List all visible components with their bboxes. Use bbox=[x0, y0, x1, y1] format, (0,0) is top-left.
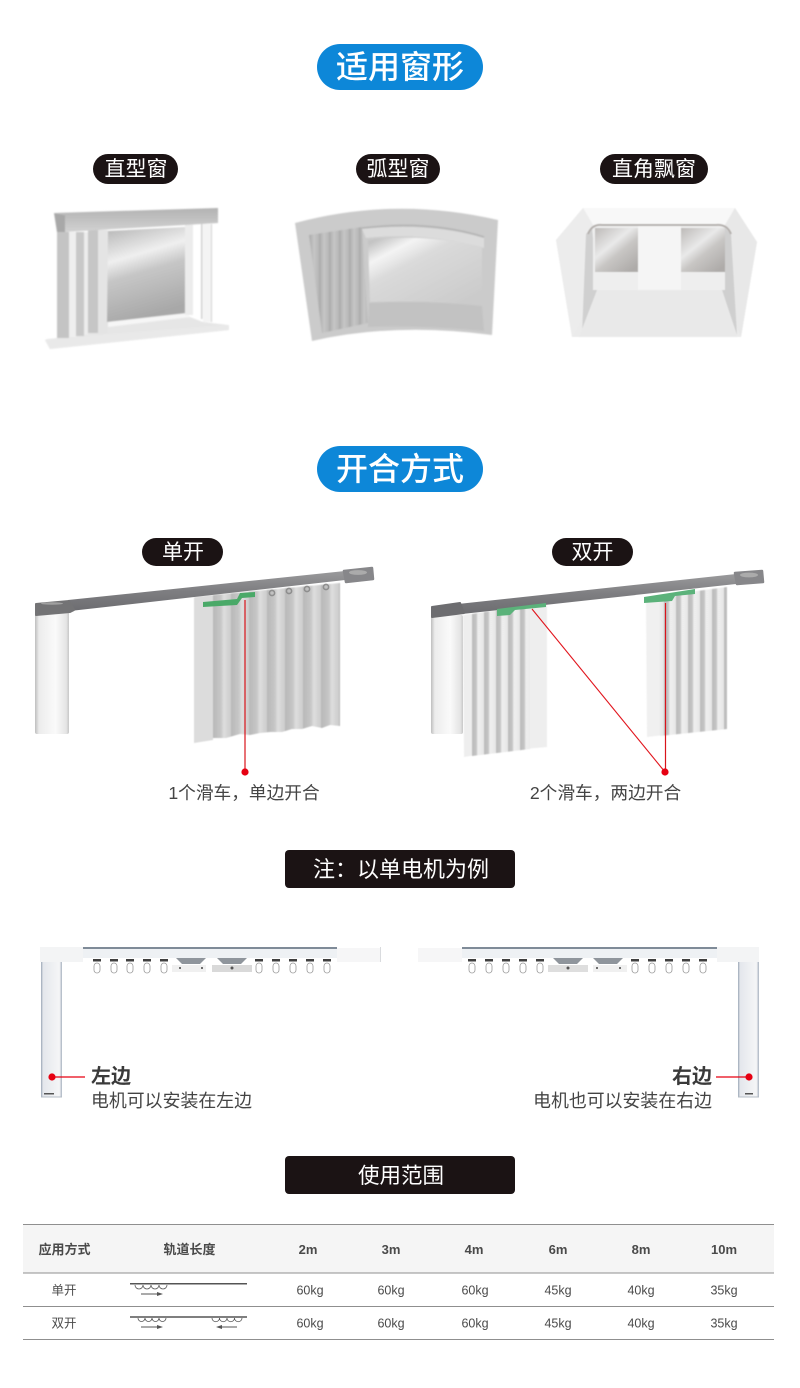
panel: right motor bbox=[418, 947, 759, 1111]
pointer line bbox=[241, 600, 249, 776]
green carriages bbox=[497, 589, 695, 616]
description: 电机也可以安装在右边 bbox=[533, 1091, 712, 1111]
caption: 2个滑车，两边开合 bbox=[530, 783, 681, 803]
panel: left motor bbox=[40, 947, 381, 1111]
carriages bbox=[172, 958, 252, 972]
label: 左边: 左边 bbox=[91, 1065, 131, 1088]
table row: 单开: 60kg bbox=[377, 1284, 405, 1298]
table row: 双开: 双开 bbox=[51, 1316, 77, 1330]
table row: 双开: 40kg bbox=[627, 1316, 655, 1330]
label: 双开: 双开 bbox=[572, 541, 614, 564]
heading: 使用范围: 使用范围 bbox=[358, 1164, 444, 1188]
table header: 轨道长度 bbox=[163, 1242, 216, 1257]
carriages bbox=[548, 958, 627, 972]
track left mount bbox=[40, 947, 381, 962]
panel: 弧型窗 bbox=[295, 154, 498, 341]
motor body bbox=[738, 962, 759, 1098]
green carriage bbox=[203, 592, 255, 607]
right curtain fabric bbox=[646, 587, 727, 737]
heading: 使用范围 bbox=[285, 1156, 515, 1194]
heading: 适用窗形 bbox=[317, 44, 483, 90]
table row: 单开: 60kg bbox=[461, 1284, 489, 1298]
table row: 双开: 60kg bbox=[296, 1316, 324, 1330]
label: 直型窗: 直型窗 bbox=[104, 158, 168, 181]
table row: 单开 bbox=[51, 1284, 738, 1298]
table header: 3m bbox=[382, 1242, 400, 1257]
track with end caps bbox=[432, 571, 763, 617]
window illustration: curved bbox=[295, 209, 498, 341]
table row: 双开: 60kg bbox=[377, 1316, 405, 1330]
table row: 双开: 60kg bbox=[461, 1316, 489, 1330]
table header bbox=[23, 1224, 774, 1273]
label: 单开: 单开 bbox=[162, 541, 204, 564]
left curtain fabric bbox=[463, 603, 547, 757]
label: 双开 bbox=[552, 538, 633, 566]
table row: 单开: 60kg bbox=[296, 1284, 324, 1298]
label: 直型窗 bbox=[93, 154, 178, 184]
table header: 8m bbox=[632, 1242, 650, 1257]
curtain motor bbox=[431, 615, 463, 734]
table header: 10m bbox=[711, 1242, 737, 1257]
table header: 4m bbox=[465, 1242, 483, 1257]
track with end caps bbox=[36, 568, 373, 615]
gliders bbox=[468, 959, 707, 973]
table row: 单开: 40kg bbox=[627, 1284, 655, 1298]
window illustration: bay bbox=[556, 208, 757, 337]
table row: 单开: 单开 bbox=[51, 1284, 77, 1298]
heading: 开合方式: 开合方式 bbox=[336, 451, 464, 487]
diagram: single opening bbox=[130, 1284, 247, 1296]
gliders bbox=[93, 959, 331, 973]
panel: 单开 bbox=[35, 538, 373, 803]
label: 弧型窗: 弧型窗 bbox=[366, 158, 430, 181]
table row: 单开: 45kg bbox=[544, 1284, 572, 1298]
panel: 直型窗 bbox=[45, 154, 229, 349]
track right mount bbox=[418, 947, 759, 962]
panel: 直角飘窗 bbox=[556, 154, 757, 337]
motor body bbox=[41, 962, 62, 1098]
table row: 双开: 45kg bbox=[544, 1316, 572, 1330]
note heading: 注：以单电机为例 bbox=[313, 857, 489, 882]
heading: 适用窗形: 适用窗形 bbox=[336, 49, 464, 85]
table row: 单开: 35kg bbox=[710, 1284, 738, 1298]
table header: 6m bbox=[549, 1242, 567, 1257]
label: 弧型窗 bbox=[356, 154, 440, 184]
label: 单开 bbox=[142, 538, 223, 566]
description: 电机可以安装在左边 bbox=[91, 1091, 252, 1111]
table row: 双开 bbox=[51, 1316, 738, 1330]
curtain rings bbox=[269, 584, 329, 596]
curtain fabric bbox=[194, 583, 340, 743]
window illustration: straight bbox=[45, 208, 229, 349]
label: 直角飘窗: 直角飘窗 bbox=[612, 158, 696, 181]
heading: 开合方式 bbox=[317, 446, 483, 492]
curtain motor bbox=[35, 612, 69, 734]
table header: 应用方式 bbox=[38, 1242, 91, 1257]
pointer lines bbox=[532, 603, 669, 776]
label: 右边: 右边 bbox=[672, 1065, 712, 1088]
diagram: double opening bbox=[130, 1317, 247, 1329]
note heading bbox=[285, 850, 515, 888]
panel: 双开 bbox=[431, 538, 763, 803]
table: 使用范围 bbox=[23, 1224, 774, 1340]
pointer bbox=[48, 1073, 85, 1081]
pointer bbox=[716, 1073, 753, 1081]
label: 直角飘窗 bbox=[600, 154, 708, 184]
caption: 1个滑车，单边开合 bbox=[168, 783, 320, 803]
table row: 双开: 35kg bbox=[710, 1316, 738, 1330]
table header: 2m bbox=[299, 1242, 317, 1257]
